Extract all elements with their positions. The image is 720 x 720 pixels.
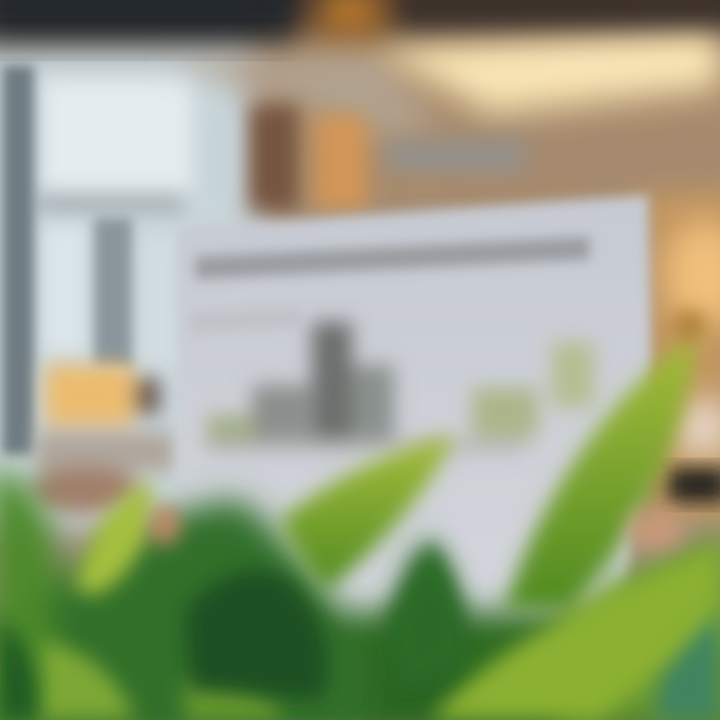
panel: display board [178,195,652,640]
warm side glow [665,220,720,455]
heading: blurred board title [195,236,590,280]
orange display at left [30,365,175,514]
chart: blurred building graphic [205,322,594,450]
columns [250,105,525,210]
dark object at right [668,468,720,502]
background: ceiling and window [0,0,720,530]
pillars [2,65,132,455]
top dark band [0,0,720,38]
pink blurred accents near foliage [151,311,706,550]
ceiling light [170,28,720,185]
foliage: back leaves [0,470,720,720]
foliage: dark leaves [0,540,720,720]
window panes [35,80,238,375]
foliage: bright leaves [40,335,720,720]
